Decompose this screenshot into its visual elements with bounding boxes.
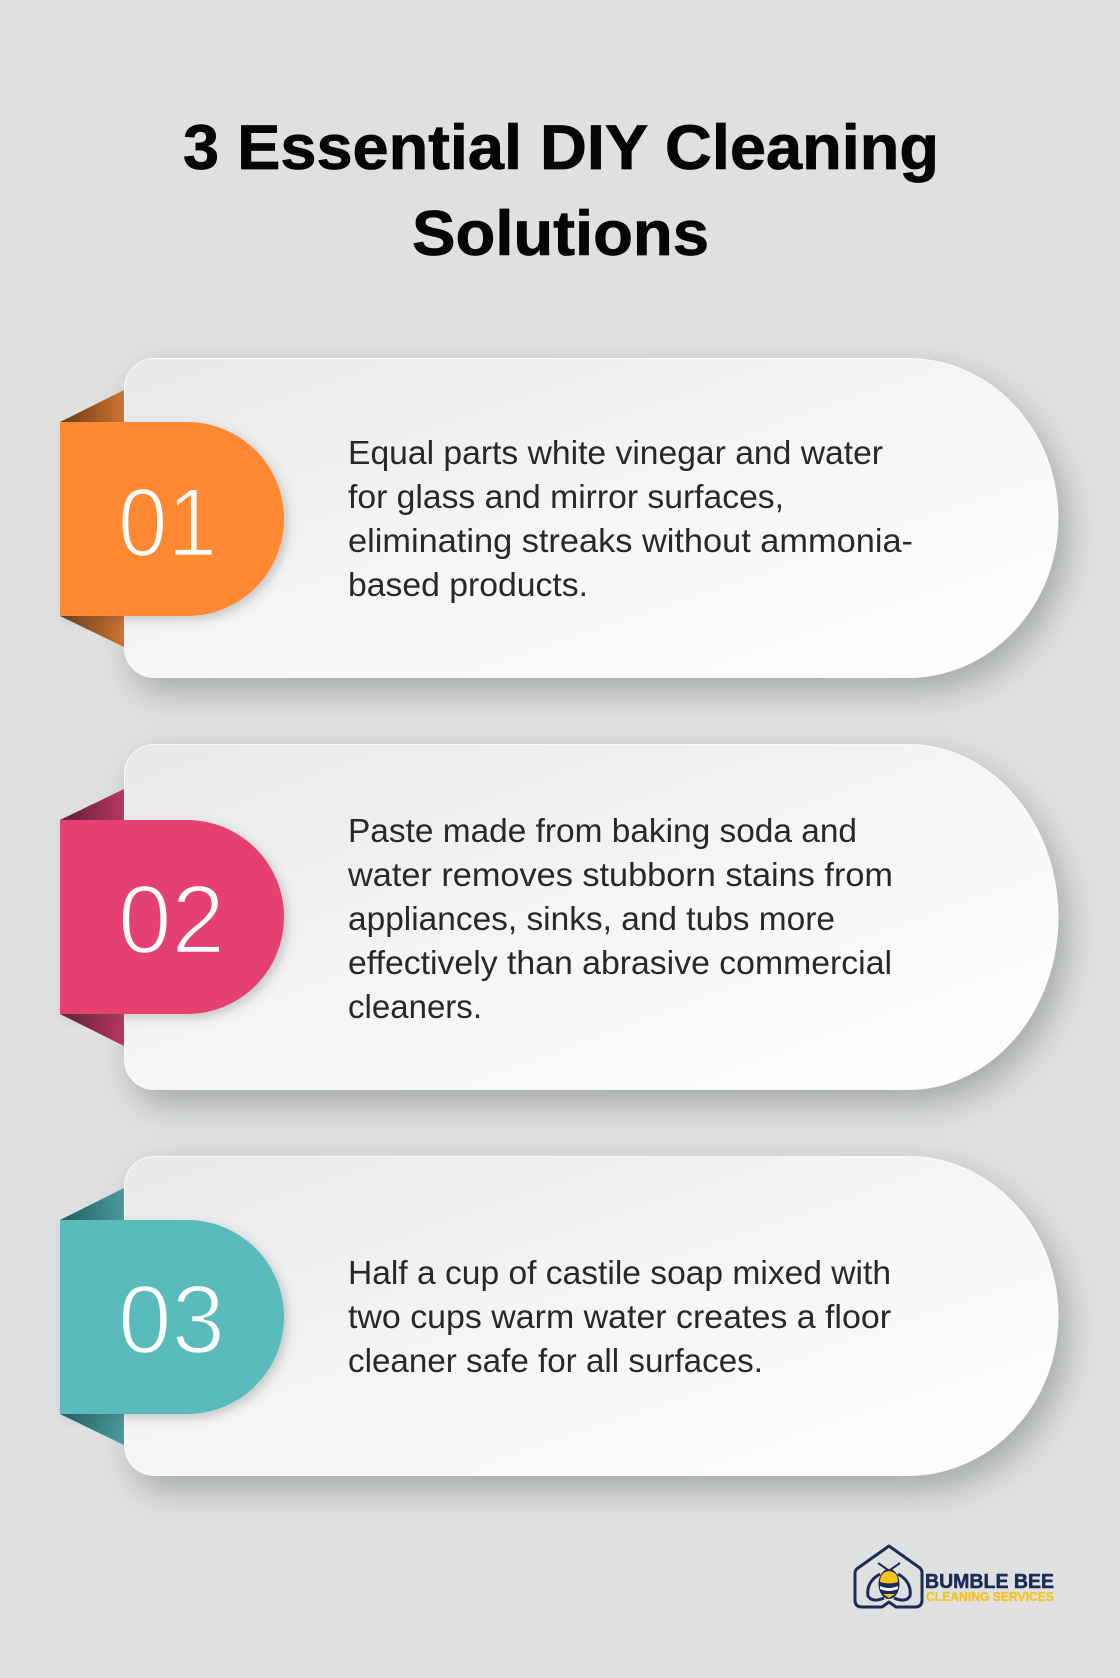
description 02: water removes stubborn stains from [347, 856, 893, 893]
title [183, 113, 939, 269]
number 03: 03 [118, 1265, 225, 1374]
description 03: cleaner safe for all surfaces. [348, 1342, 763, 1379]
description 01: based products. [348, 566, 588, 603]
description 03: Half a cup of castile soap mixed with [348, 1254, 891, 1291]
number 02: 02 [118, 865, 225, 974]
description 02 [347, 812, 893, 1025]
ribbon folds 01 [60, 390, 124, 647]
panel: step 01 [60, 358, 1058, 678]
card 03 background [124, 1156, 1058, 1476]
description 02: appliances, sinks, and tubs more [348, 900, 835, 937]
description 01: eliminating streaks without ammonia- [348, 522, 913, 559]
description 02: Paste made from baking soda and [348, 812, 857, 849]
card 01 background [124, 358, 1058, 678]
description 01: Equal parts white vinegar and water [348, 434, 883, 471]
title: 3 Essential DIY Cleaning [183, 113, 939, 183]
number badge 03 [60, 1220, 284, 1414]
number badge 01 [60, 422, 284, 616]
logo tagline: CLEANING SERVICES [926, 1590, 1054, 1604]
description 02: cleaners. [348, 988, 482, 1025]
logo wordmark: BUMBLE BEE [925, 1571, 1054, 1593]
title: Solutions [412, 199, 709, 269]
description 03 [348, 1254, 891, 1379]
panel: step 02 [60, 744, 1058, 1090]
logo: Bumble Bee Cleaning Services [855, 1546, 1054, 1607]
icon: house with bee [855, 1546, 922, 1607]
description 01 [348, 434, 913, 603]
ribbon folds 03 [60, 1188, 124, 1445]
description 01: for glass and mirror surfaces, [348, 478, 784, 515]
description 02: effectively than abrasive commercial [348, 944, 892, 981]
number 01: 01 [118, 468, 217, 577]
card 02 background [124, 744, 1058, 1090]
ribbon folds 02 [60, 789, 124, 1046]
panel: step 03 [60, 1156, 1058, 1476]
description 03: two cups warm water creates a floor [348, 1298, 891, 1335]
number badge 02 [60, 820, 284, 1014]
